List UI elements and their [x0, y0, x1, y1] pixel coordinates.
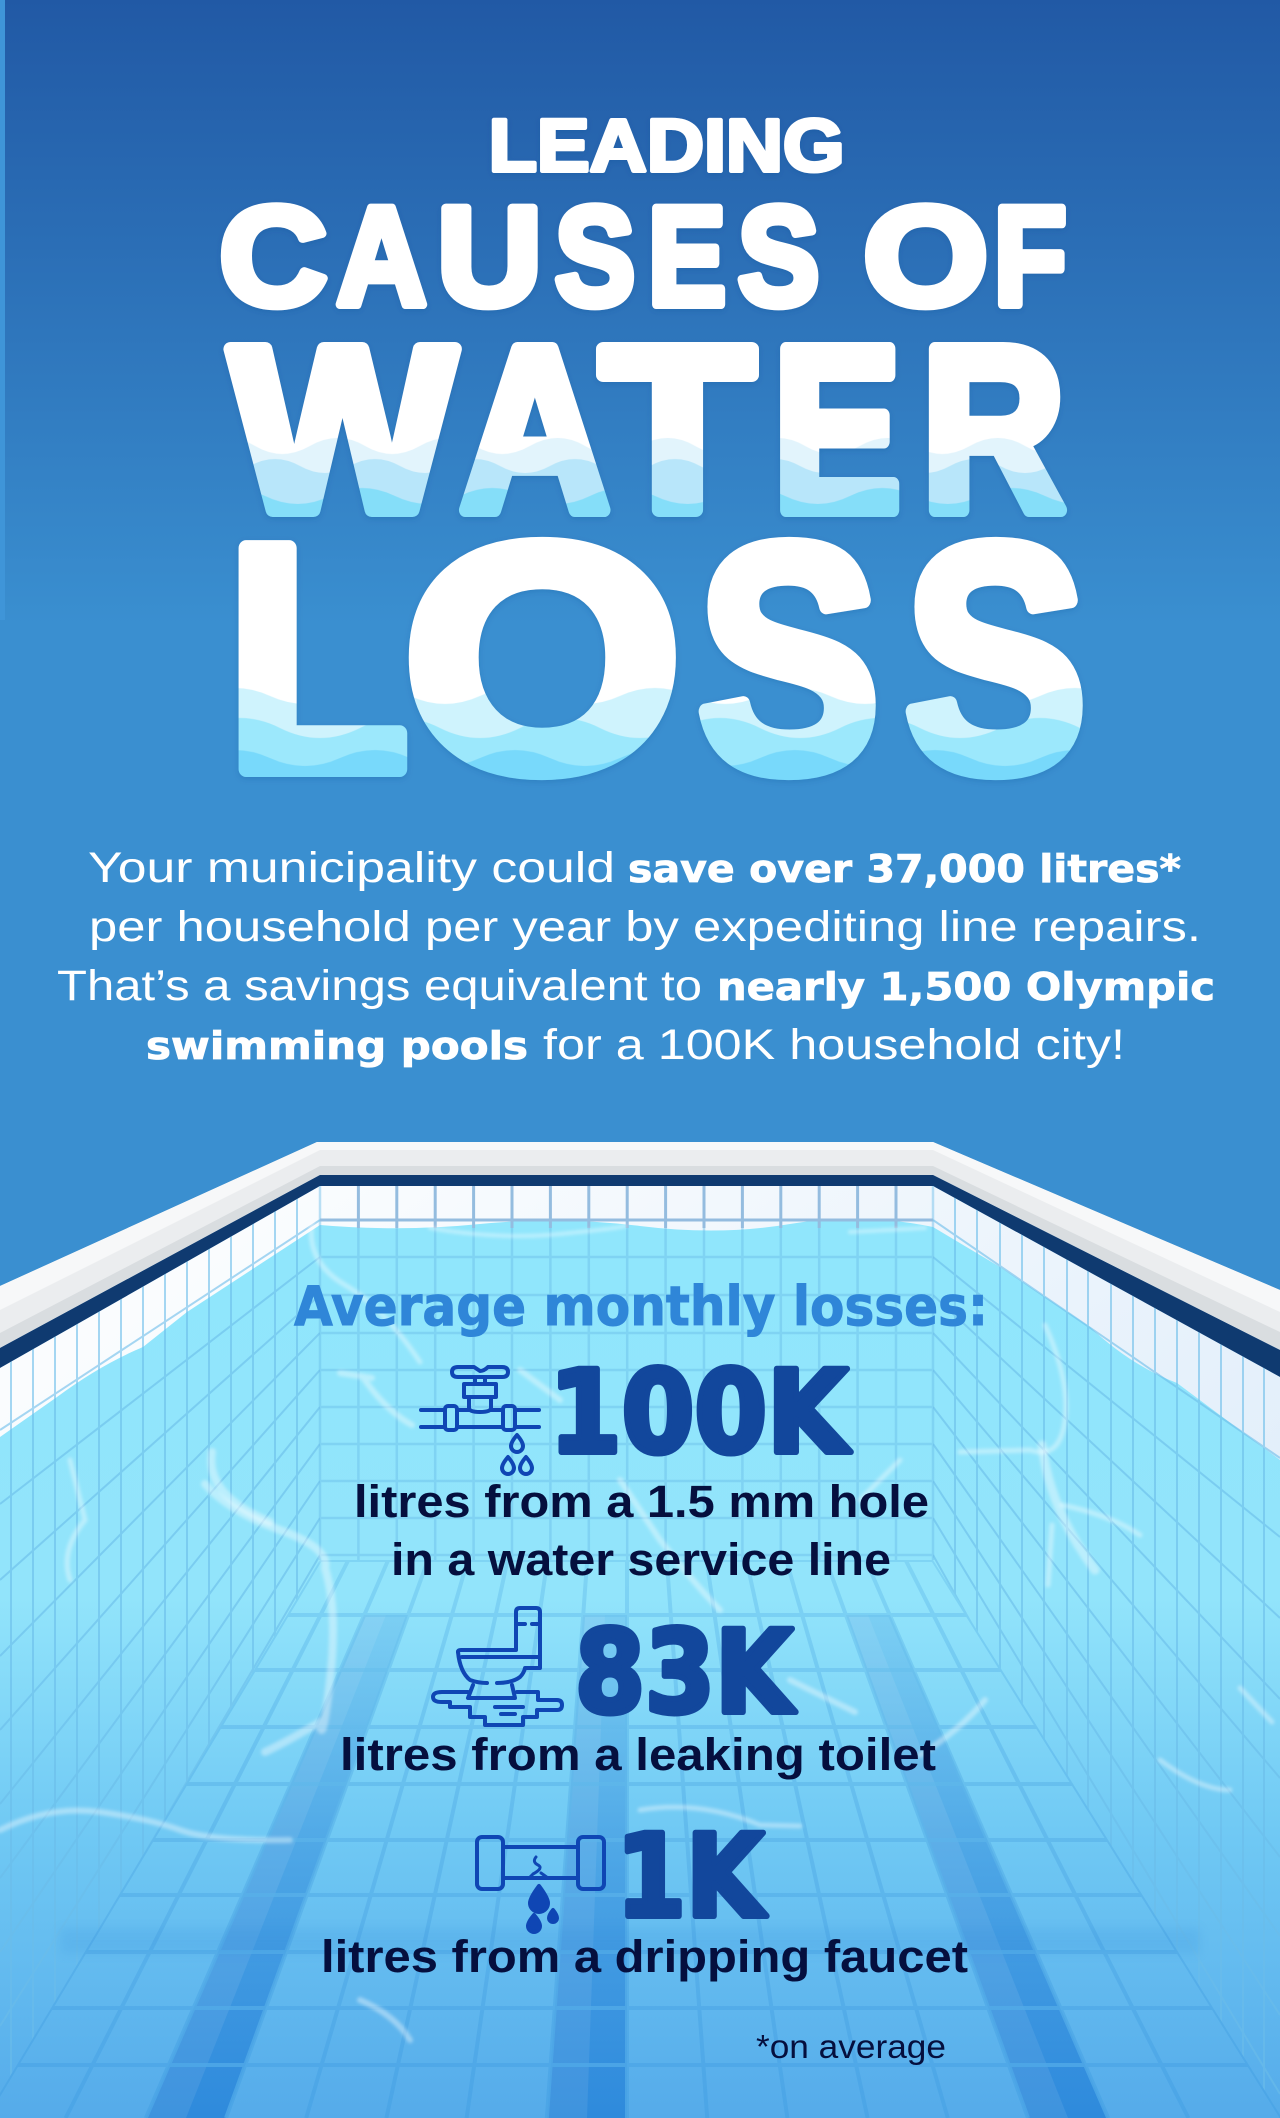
caption: litres from a 1.5 mm hole: [354, 1476, 929, 1527]
title line: WATER with wave fill: T: [601, 298, 754, 560]
pool dark band: [0, 1175, 1280, 1377]
stat: 83K from leaking toilet: [340, 1606, 936, 1780]
intro paragraph: That’s a savings equivalent to: [57, 962, 702, 1010]
caption: litres from a dripping faucet: [321, 1931, 968, 1982]
title line: CAUSES OF: O: [864, 178, 988, 334]
section heading: Average monthly losses:: [294, 1275, 988, 1338]
floor shadow band: [60, 1928, 1200, 1954]
pool coping: [0, 1142, 1280, 1350]
title line: CAUSES OF: S: [738, 178, 819, 334]
intro paragraph: for a 100K household city!: [543, 1021, 1125, 1069]
back wall top tile row lines: [320, 1186, 933, 1228]
number: 100K: [549, 1346, 851, 1479]
background: blue sky gradient: [0, 0, 1280, 1300]
title line: WATER with wave fill: A: [460, 298, 610, 560]
intro paragraph: nearly 1,500 Olympic: [717, 965, 1215, 1009]
title line: LEADING: LEADING: [489, 104, 845, 187]
icon: leaking pipe valve: [421, 1367, 539, 1474]
title line: CAUSES OF: U: [437, 178, 542, 334]
left wall grid: [0, 1198, 320, 2076]
intro paragraph: save over 37,000 litres*: [628, 847, 1181, 891]
back wall grid: [320, 1186, 933, 1560]
icon: leaking toilet: [433, 1608, 562, 1725]
title line: LOSS with wave fill: O: [403, 479, 682, 838]
right wall grid: [933, 1198, 1280, 2094]
title line: WATER with wave fill: E: [773, 298, 901, 560]
number: 83K: [575, 1606, 796, 1739]
intro paragraph: swimming pools: [146, 1024, 528, 1068]
pool illustration: [0, 1100, 1280, 2118]
number: 1K: [616, 1810, 767, 1943]
stat: 100K from hole in service line: in a water service line: [391, 1534, 891, 1585]
intro paragraph: per household per year by expediting line repairs.: [89, 903, 1201, 951]
floor lane tiles: [146, 1615, 1108, 2118]
icon: cracked pipe: [477, 1837, 604, 1932]
title: [220, 104, 1087, 838]
stat: 100K from hole in service line: [354, 1346, 929, 1585]
title line: LOSS with wave fill: S: [905, 479, 1087, 838]
intro paragraph: Your municipality could: [88, 844, 615, 892]
title line: WATER with wave fill: R: [922, 298, 1065, 560]
pool tile surface: [0, 1186, 1280, 2118]
title line: CAUSES OF: S: [555, 178, 635, 334]
floor grid: [0, 1560, 1280, 2118]
title line: CAUSES OF: E: [648, 178, 726, 334]
caption: litres from a leaking toilet: [340, 1729, 936, 1780]
intro paragraph: [57, 844, 1215, 1069]
title line: LOSS with wave fill: S: [698, 479, 880, 838]
title line: CAUSES OF: F: [994, 178, 1066, 334]
title line: CAUSES OF: A: [336, 178, 426, 334]
footnote: *on average: [756, 2028, 946, 2065]
left edge highlight: [0, 0, 5, 620]
pool water: [0, 1219, 1280, 2118]
title line: WATER with wave fill: W: [230, 298, 455, 560]
water caustics: [0, 1222, 1272, 2040]
stat: 1K from dripping faucet: [321, 1810, 968, 1982]
title line: LOSS with wave fill: L: [226, 479, 409, 838]
title line: CAUSES OF: C: [220, 178, 327, 334]
